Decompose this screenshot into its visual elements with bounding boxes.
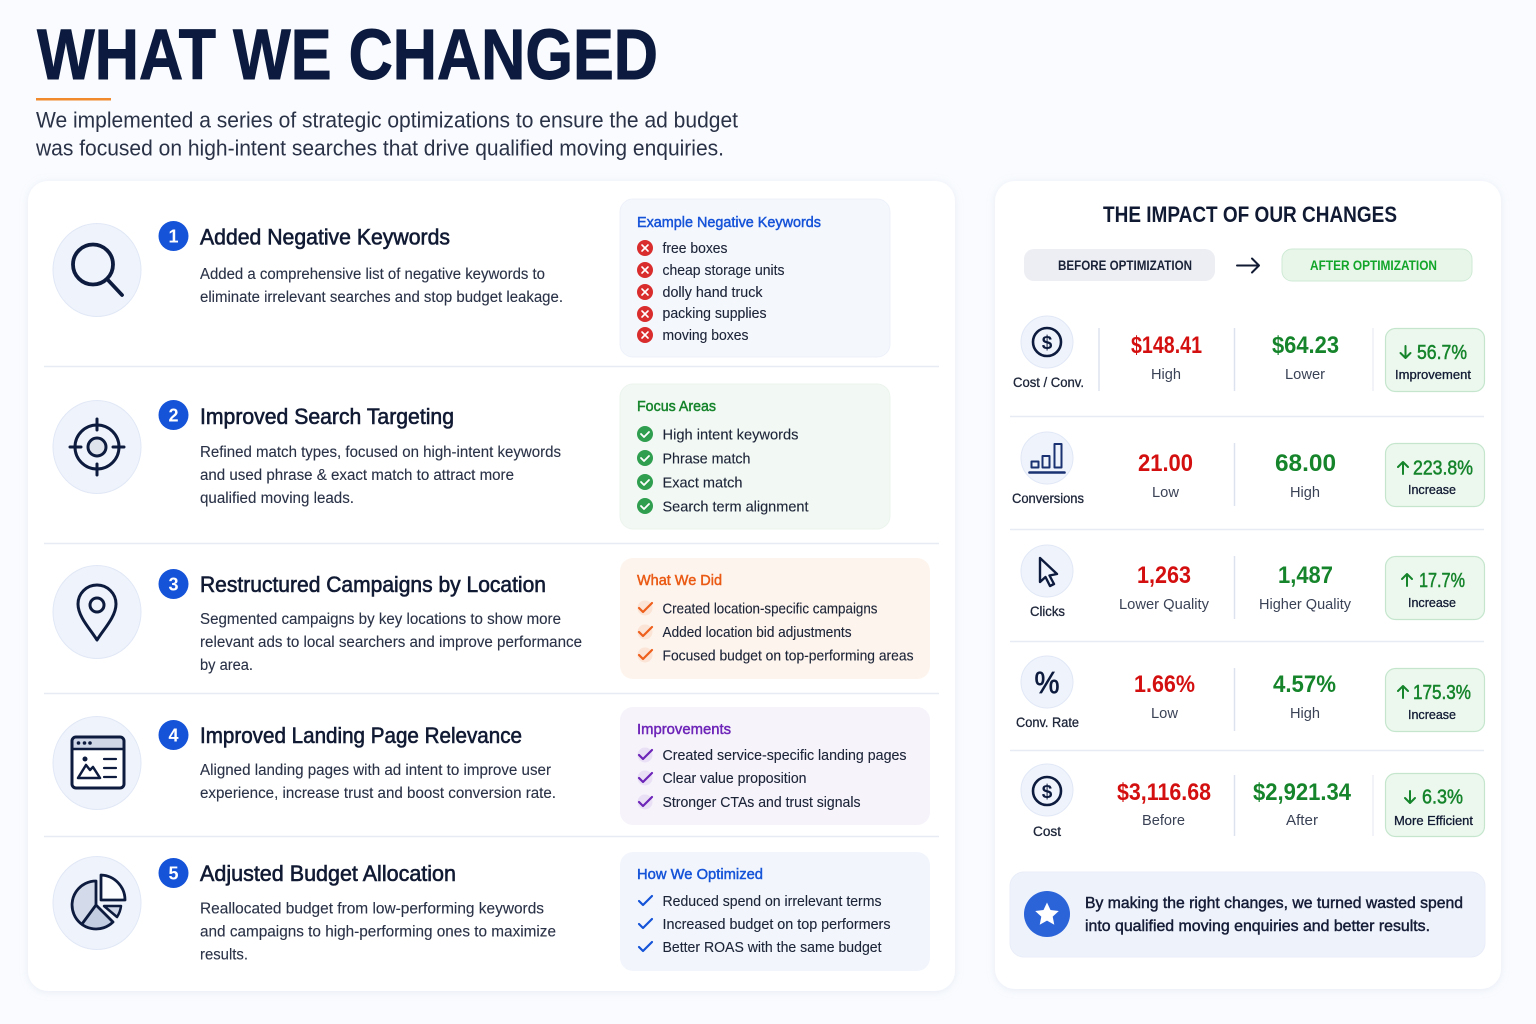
focus list: Phrase match: [662, 452, 750, 468]
improvements list: Stronger CTAs and trust signals: [662, 795, 860, 811]
icon: percent: [1021, 656, 1073, 708]
callout: what we did: What We Did: [637, 573, 722, 589]
badge: 175.3% increase: [1386, 668, 1484, 732]
icon: location pin: [53, 566, 141, 658]
keyword list: free boxes: [662, 241, 728, 257]
metric row: cost: Before: [1142, 812, 1185, 829]
step 1 heading: Added Negative Keywords: [200, 224, 450, 250]
metric row: cost: [1021, 764, 1484, 839]
metric row: conversion rate: [1016, 656, 1484, 732]
step 2 number: 2: [168, 406, 179, 426]
metric row: clicks: Clicks: [1030, 604, 1065, 619]
badge: 175.3% increase: Increase: [1408, 707, 1456, 722]
badge: 17.7% increase: [1386, 556, 1484, 620]
badge: 56.7% improvement: [1386, 328, 1484, 392]
step 2 number: [158, 400, 188, 430]
step 3 description: by area.: [200, 657, 253, 674]
what we did list: Focused budget on top-performing areas: [662, 648, 914, 664]
focus list: Search term alignment: [662, 500, 808, 516]
step 2 description: Refined match types, focused on high-intent keywords: [200, 444, 561, 461]
badge: 6.3% more efficient: More Efficient: [1394, 813, 1473, 828]
metric row: clicks: [1021, 545, 1484, 620]
step 5 heading: Adjusted Budget Allocation: [200, 861, 456, 886]
step 1 description: Added a comprehensive list of negative keywords to: [200, 266, 545, 283]
metric row: cost per conversion: [1013, 316, 1484, 392]
icon: dollar: $: [1042, 333, 1053, 354]
step 3 number: 3: [168, 574, 179, 594]
metric row: conversions: Low: [1152, 484, 1179, 501]
callout: focus areas: Focus Areas: [637, 399, 716, 415]
callout: example negative keywords: [620, 199, 890, 357]
after pill: [1282, 249, 1472, 281]
metric row: cost: $2,921.34: [1253, 779, 1352, 806]
metric row: cost: Cost: [1033, 824, 1061, 839]
metric row: cost per conversion: $64.23: [1272, 332, 1339, 359]
icon: magnifying glass: [53, 224, 141, 316]
metric row: conversions: 21.00: [1138, 450, 1193, 477]
callout: how we optimized: How We Optimized: [637, 867, 763, 883]
summary text: [1085, 895, 1463, 935]
icon: landing page window: [53, 716, 141, 810]
badge: 56.7% improvement: Improvement: [1395, 367, 1471, 382]
metric row: clicks: 1,263: [1137, 562, 1191, 589]
title accent line: [36, 98, 111, 100]
focus list: High intent keywords: [662, 428, 798, 444]
panel: impact: [995, 181, 1501, 989]
what we did list: [638, 600, 914, 664]
summary text: By making the right changes, we turned wasted spend: [1085, 895, 1463, 912]
improvements list: Clear value proposition: [662, 771, 806, 787]
title: WHAT WE CHANGED: [37, 16, 658, 95]
icon: cursor: [1021, 545, 1073, 597]
callout: how we optimized: [620, 852, 930, 971]
step 4 number: 4: [168, 726, 179, 746]
subtitle: was focused on high-intent searches that drive qualified moving enquiries.: [35, 136, 724, 160]
metric row: cost: $3,116.68: [1117, 779, 1211, 806]
badge: 175.3% increase: 175.3%: [1413, 682, 1471, 704]
metric row: conversion rate: Low: [1151, 705, 1178, 722]
optimized list: [639, 894, 890, 956]
metric row: cost per conversion: Cost / Conv.: [1013, 375, 1084, 390]
callout: example negative keywords: Example Negative Keywords: [637, 215, 821, 231]
metric row: cost per conversion: $148.41: [1131, 332, 1202, 359]
icon: dollar: [1021, 316, 1073, 368]
step 5 number: [158, 858, 188, 888]
keyword list: moving boxes: [662, 328, 748, 344]
badge: 223.8% increase: [1386, 444, 1484, 506]
step 5 number: 5: [168, 864, 179, 884]
subtitle: We implemented a series of strategic optimizations to ensure the ad budget: [36, 108, 738, 132]
step 2 heading: Improved Search Targeting: [200, 404, 454, 429]
what we did list: Created location-specific campaigns: [662, 602, 878, 618]
badge: 6.3% more efficient: [1386, 774, 1484, 836]
step 1 description: [200, 266, 563, 306]
step 3 heading: Restructured Campaigns by Location: [200, 572, 546, 597]
step 2 description: and used phrase & exact match to attract more: [200, 467, 514, 484]
optimized list: Increased budget on top performers: [662, 917, 890, 933]
keyword list: cheap storage units: [662, 263, 784, 279]
callout: summary: [1010, 872, 1485, 957]
metric row: conversions: [1012, 432, 1484, 506]
step 3 description: relevant ads to local searchers and improve performance: [200, 634, 582, 651]
callout: improvements: Improvements: [637, 722, 731, 738]
metric row: conversion rate: Conv. Rate: [1016, 715, 1079, 730]
callout: what we did: [620, 558, 930, 679]
metric row: cost: After: [1286, 812, 1318, 829]
icon: pie chart: [53, 856, 141, 950]
keyword list: packing supplies: [662, 306, 766, 322]
badge: 56.7% improvement: 56.7%: [1417, 342, 1467, 364]
after pill: AFTER OPTIMIZATION: [1310, 258, 1437, 273]
badge: 17.7% increase: Increase: [1408, 595, 1456, 610]
subtitle: [35, 108, 738, 160]
step 5 description: Reallocated budget from low-performing keywords: [200, 900, 544, 918]
badge: 6.3% more efficient: 6.3%: [1422, 786, 1463, 808]
metric row: cost per conversion: High: [1151, 366, 1181, 383]
step 4 description: [200, 762, 556, 802]
metric row: conversions: 68.00: [1275, 450, 1336, 477]
panel: changes list: [28, 181, 955, 991]
step 3 number: [158, 569, 188, 599]
icon: percent: %: [1034, 665, 1060, 700]
arrow: before to after: [1237, 258, 1259, 272]
metric row: clicks: 1,487: [1278, 562, 1333, 589]
step 4 description: Aligned landing pages with ad intent to improve user: [200, 762, 551, 779]
what we did list: Added location bid adjustments: [662, 625, 852, 641]
metric row: conversion rate: 1.66%: [1134, 671, 1195, 698]
metric row: conversions: High: [1290, 484, 1320, 501]
icon: star: [1024, 891, 1070, 937]
optimized list: Reduced spend on irrelevant terms: [662, 894, 882, 910]
step 5 description: and campaigns to high-performing ones to maximize: [200, 924, 556, 940]
step 4 heading: Improved Landing Page Relevance: [200, 723, 522, 748]
badge: 17.7% increase: 17.7%: [1419, 570, 1465, 592]
callout: focus areas: [620, 384, 890, 529]
focus list: Exact match: [662, 476, 742, 492]
metric row: conversion rate: High: [1290, 705, 1320, 722]
summary text: into qualified moving enquiries and better results.: [1085, 918, 1430, 935]
step 3 description: Segmented campaigns by key locations to show more: [200, 611, 561, 628]
metric row: cost per conversion: Lower: [1285, 366, 1325, 383]
badge: 223.8% increase: Increase: [1408, 482, 1456, 497]
focus list: [637, 426, 808, 516]
metric row: conversions: Conversions: [1012, 491, 1084, 506]
step 1 number: 1: [168, 226, 179, 246]
impact heading: THE IMPACT OF OUR CHANGES: [1103, 202, 1397, 227]
callout: improvements: [620, 707, 930, 825]
improvements list: [638, 748, 906, 811]
step 2 description: qualified moving leads.: [200, 490, 354, 507]
before pill: BEFORE OPTIMIZATION: [1058, 258, 1192, 273]
icon: target: [53, 400, 141, 494]
step 5 description: [200, 900, 556, 964]
metric row: clicks: Higher Quality: [1259, 596, 1351, 613]
keyword list: [637, 240, 784, 344]
icon: dollar cost: [1021, 764, 1073, 816]
step 1 number: [158, 221, 188, 251]
badge: 223.8% increase: 223.8%: [1413, 458, 1473, 480]
step 2 description: [200, 444, 561, 507]
step 4 description: experience, increase trust and boost conversion rate.: [200, 785, 556, 802]
improvements list: Created service-specific landing pages: [662, 748, 906, 764]
step 5 description: results.: [200, 946, 248, 964]
step 4 number: [158, 720, 188, 750]
step 1 description: eliminate irrelevant searches and stop budget leakage.: [200, 289, 563, 306]
step 3 description: [200, 611, 582, 674]
optimized list: Better ROAS with the same budget: [662, 940, 882, 956]
keyword list: dolly hand truck: [662, 285, 763, 301]
icon: dollar cost: $: [1042, 782, 1053, 803]
before pill: [1024, 249, 1215, 281]
metric row: conversion rate: 4.57%: [1273, 671, 1336, 698]
metric row: clicks: Lower Quality: [1119, 596, 1209, 613]
icon: bar chart: [1021, 432, 1073, 484]
